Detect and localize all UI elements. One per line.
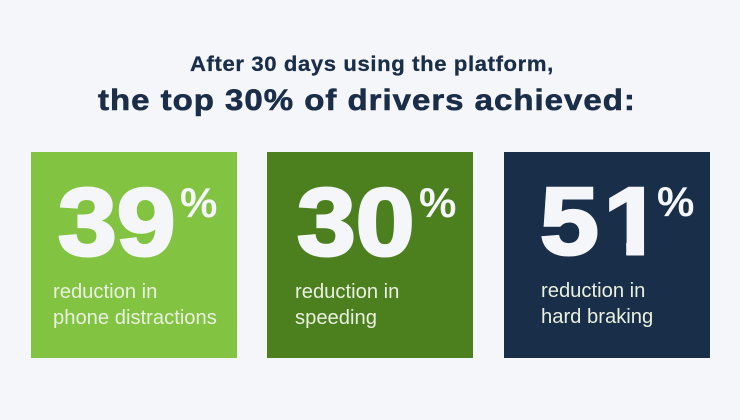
- label: [541, 280, 653, 328]
- label: reduction in: [541, 280, 645, 302]
- label: [53, 281, 217, 328]
- percent sign: %: [180, 179, 217, 226]
- panel: phone distractions: [31, 152, 237, 358]
- label: phone distractions: [53, 306, 217, 328]
- label: reduction in: [295, 281, 399, 303]
- label: hard braking: [541, 306, 653, 328]
- label: speeding: [295, 306, 377, 328]
- stat number 51: [540, 168, 644, 275]
- label: [295, 281, 399, 328]
- stat number 51: 1: [604, 168, 662, 275]
- label: reduction in: [53, 281, 157, 303]
- title line 1: After 30 days using the platform,: [190, 53, 554, 76]
- percent sign: %: [657, 178, 694, 225]
- title line 2: the top 30% of drivers achieved:: [98, 84, 636, 117]
- panel: speeding: [267, 152, 473, 358]
- stat number 51: 5: [540, 168, 599, 275]
- title: [98, 53, 636, 117]
- stat number 39: 39: [58, 169, 175, 276]
- stat number 30: 30: [297, 169, 414, 276]
- percent sign: %: [419, 179, 456, 226]
- panel: hard braking: [504, 152, 710, 358]
